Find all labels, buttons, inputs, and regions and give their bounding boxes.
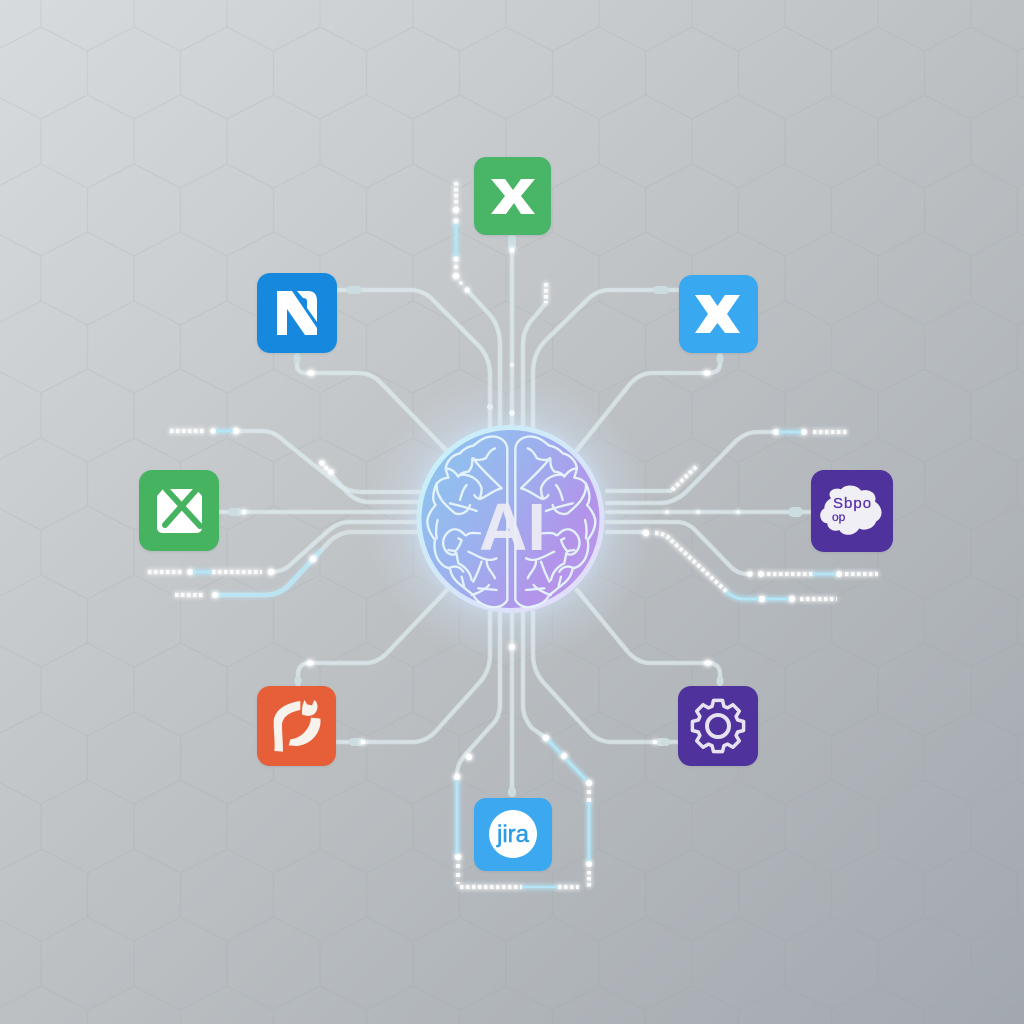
connector: left green icon to hub [220, 510, 418, 514]
connector: left upper trace [170, 428, 420, 492]
connector: left short beaded trace [319, 460, 420, 502]
connector: right short beaded trace [607, 465, 698, 491]
connector: left lower trace one [148, 522, 418, 575]
icon: purple cloud tile [811, 470, 893, 552]
connector: right center to purple icon [607, 510, 811, 514]
icon: purple gear tile [678, 686, 758, 766]
connector: hub to beaded frame right of jira [523, 612, 592, 889]
cloud label: Sbpo [833, 495, 872, 512]
icon: orange wrench refresh tile [257, 686, 336, 766]
connector: left lower trace two [175, 532, 418, 598]
connector: blue N icon right side to hub [337, 290, 490, 428]
jira label: jira [496, 821, 530, 848]
connector: hub to gear icon top [577, 590, 720, 685]
connector: right lower trace one [607, 522, 878, 577]
connector: upper right beaded trace to hub [523, 283, 546, 428]
connector: top green icon to hub [509, 238, 515, 428]
icon: light blue X tile [679, 275, 758, 353]
connector: hub to beaded frame left of jira [454, 612, 500, 884]
connector: right lower trace two [607, 530, 837, 602]
icon: left green envelope X tile [139, 470, 219, 551]
central glow [365, 374, 655, 664]
icon: top green X tile [474, 157, 551, 235]
icon: purple cloud tile: op [832, 510, 846, 524]
connector: hub to gear icon left side [533, 612, 679, 744]
connector: hub to orange icon right side [337, 612, 490, 744]
connector: hub to orange icon top [298, 590, 447, 685]
beaded trace under jira icon [460, 886, 579, 888]
connector: blue N icon bottom to hub [297, 355, 446, 450]
hub disc [419, 428, 602, 610]
AI brain hub [419, 428, 602, 610]
connector: upper left beaded trace to hub [453, 182, 500, 428]
icon: jira tile [474, 798, 552, 871]
connector: blue X icon bottom to hub [577, 355, 720, 450]
connector: hub to jira icon [509, 612, 515, 793]
icon: blue N tile [257, 273, 337, 353]
AI label: AI [479, 490, 546, 565]
connector: right upper trace [607, 429, 847, 503]
brain outline [427, 437, 595, 607]
connector: blue X icon left side to hub [533, 290, 679, 428]
